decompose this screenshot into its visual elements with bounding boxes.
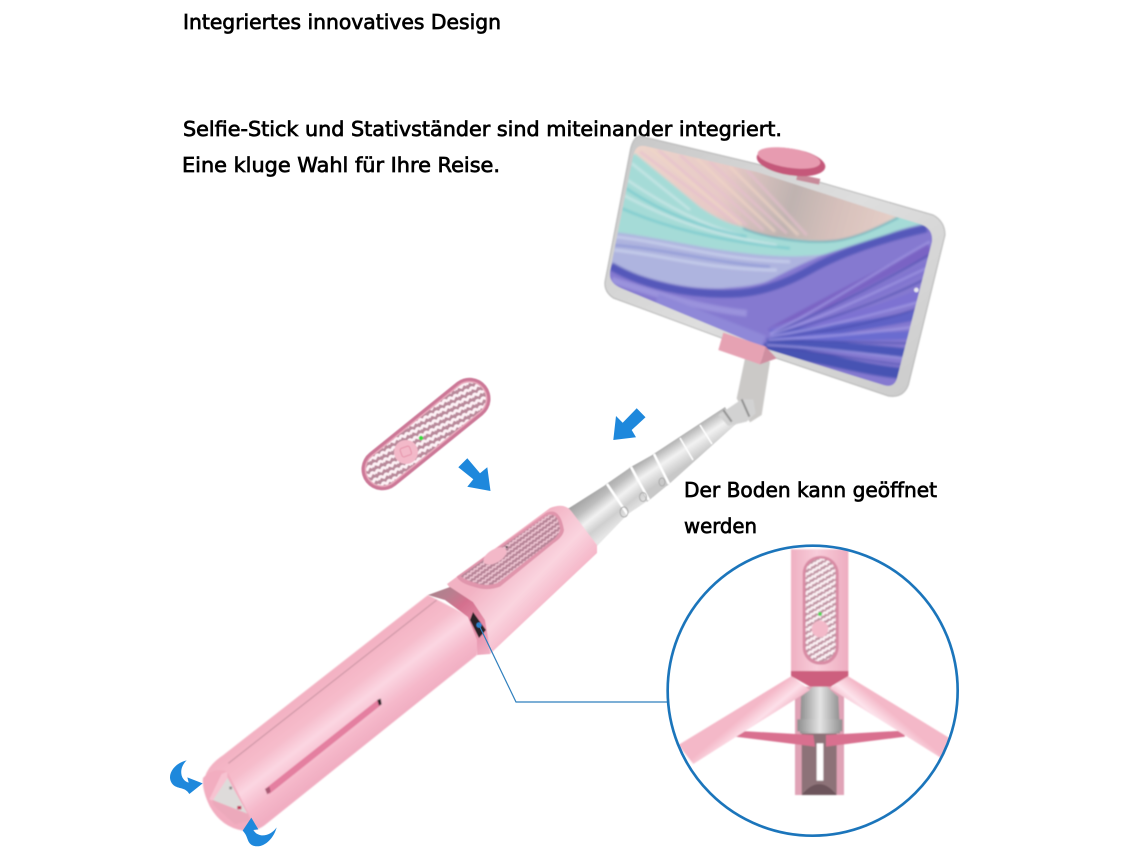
heading: design title: Integriertes innovatives Design <box>183 10 501 34</box>
mounted remote on grip <box>457 511 564 589</box>
collar ring <box>428 587 490 655</box>
detail circle outline <box>668 546 958 836</box>
leg slot <box>265 699 382 794</box>
remote green LED <box>419 436 423 440</box>
removable remote control <box>353 369 499 499</box>
text block: intro line 2: Eine kluge Wahl für Ihre Reise. <box>182 153 500 177</box>
telescopic metal pole <box>566 407 736 546</box>
upper grip with collar <box>428 506 597 655</box>
tripod straps <box>735 731 905 747</box>
purple fold <box>608 222 937 397</box>
teal band <box>618 152 922 258</box>
phone screen wallpaper <box>609 146 933 386</box>
text block: intro line 1: Selfie-Stick und Stativständer sind miteinander integriert. <box>183 117 782 141</box>
arrow: blue pointing to pole <box>613 408 646 440</box>
curved arrows: opening end cap <box>170 760 277 846</box>
remote shutter button <box>394 440 418 464</box>
bottom clamp <box>718 333 777 364</box>
fanned folds <box>770 248 930 333</box>
tripod lower tube <box>795 687 844 795</box>
handle seam <box>228 600 437 763</box>
tripod left leg <box>678 676 810 764</box>
phone body <box>605 136 945 396</box>
phone holder with phone <box>590 133 957 426</box>
tripod remote <box>803 556 839 665</box>
holder bracket <box>737 358 770 422</box>
top clamp disc <box>755 143 827 185</box>
detail circle: open tripod <box>668 546 958 836</box>
connector line to detail circle <box>478 623 668 702</box>
tripod metal hub <box>797 687 842 733</box>
curved arrow left <box>170 760 203 794</box>
curved arrow bottom <box>243 818 277 846</box>
text block: base can be opened line 2: werden <box>684 514 757 538</box>
tripod handle <box>791 549 848 672</box>
front camera dot <box>914 288 919 292</box>
lilac band <box>612 232 823 290</box>
pole joint <box>718 399 756 426</box>
tripod collar <box>791 671 848 687</box>
tripod handle body <box>203 595 480 831</box>
illustration: selfie stick infographic <box>170 13 959 846</box>
text block: base can be opened line 1: Der Boden kann geöffnet <box>684 478 937 502</box>
arrow: blue pointing to handle <box>458 458 490 491</box>
handle end cap with opening <box>203 770 253 831</box>
tripod right leg <box>830 675 950 758</box>
